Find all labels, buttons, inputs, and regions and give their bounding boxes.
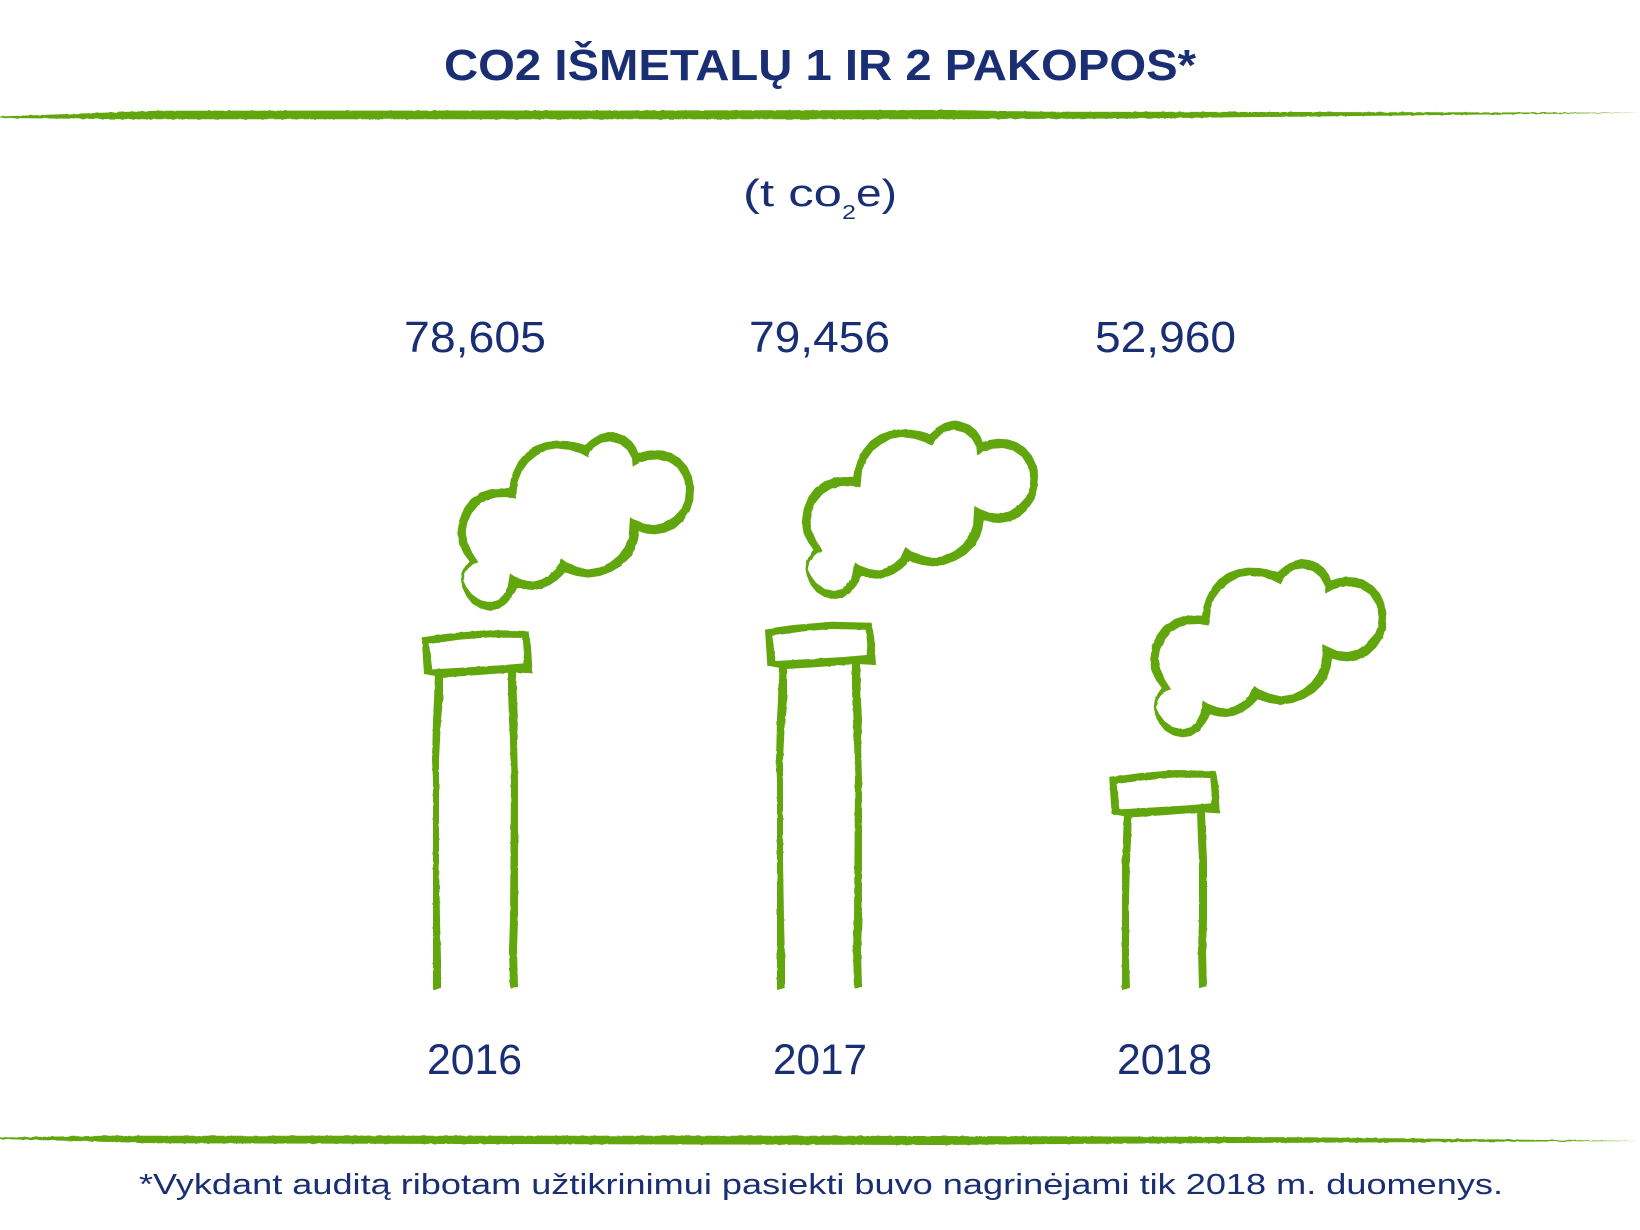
- chimney shaft 2017: [776, 664, 862, 990]
- chimney cap 2017: [765, 622, 876, 669]
- title: CO2 IŠMETALŲ 1 IR 2 PAKOPOS*: [444, 39, 1197, 90]
- unit label: e): [856, 173, 897, 215]
- smoke cloud 2018: [1150, 559, 1387, 737]
- chimney cap 2016: [422, 630, 533, 677]
- chimney 2018: [1109, 559, 1387, 990]
- chimney cap 2018: [1109, 770, 1220, 817]
- value 2016: 78,605: [404, 313, 546, 362]
- year 2016: 2016: [427, 1036, 522, 1084]
- year 2017: 2017: [773, 1036, 867, 1084]
- top brush divider: [0, 110, 1640, 119]
- year 2018: 2018: [1117, 1036, 1212, 1084]
- unit label: 2: [842, 202, 856, 224]
- chimney shaft 2016: [432, 672, 518, 990]
- value 2018: 52,960: [1095, 313, 1236, 362]
- smoke cloud 2016: [457, 432, 694, 610]
- smoke cloud 2017: [802, 421, 1038, 599]
- chimney 2017: [765, 421, 1038, 990]
- chimney shaft 2018: [1122, 812, 1207, 990]
- unit label: (t co: [743, 173, 842, 215]
- chimney 2016: [422, 432, 694, 990]
- footnote: *Vykdant auditą ribotam užtikrinimui pasiekti buvo nagrinėjami tik 2018 m. duomenys.: [139, 1169, 1503, 1201]
- bottom brush divider: [0, 1136, 1640, 1145]
- unit label: [743, 173, 897, 224]
- value 2017: 79,456: [749, 313, 890, 362]
